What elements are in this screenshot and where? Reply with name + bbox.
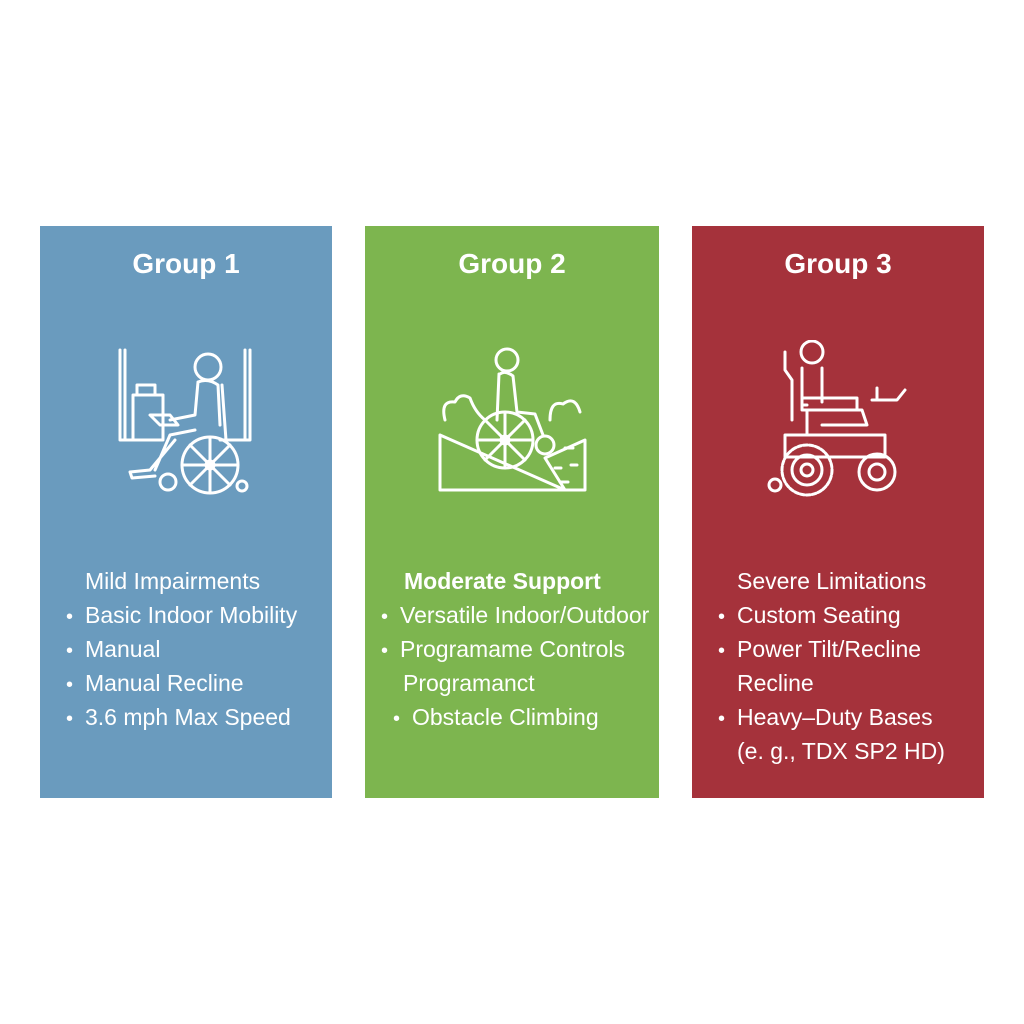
bullets: • xyxy=(393,708,400,730)
text: group 1 features: Manual Recline xyxy=(85,670,244,696)
bullets: • xyxy=(66,708,73,730)
text: group 1 features: Manual xyxy=(85,636,160,662)
text: group 2 features xyxy=(400,568,649,730)
text: group 1 features xyxy=(85,568,298,730)
bullets xyxy=(718,606,725,730)
text: group 1 features: Mild Impairments xyxy=(85,568,260,594)
text: group 3 features: Heavy–Duty Bases xyxy=(737,704,933,730)
panel: group 3 xyxy=(692,226,984,798)
text: group 1 features: 3.6 mph Max Speed xyxy=(85,704,291,730)
icon: wheelchair on slope xyxy=(438,348,586,492)
panel: group 1 xyxy=(40,226,332,798)
bullets: • xyxy=(381,606,388,628)
text: group 2 features: Obstacle Climbing xyxy=(412,704,599,730)
bullets: • xyxy=(718,640,725,662)
bullets: • xyxy=(66,640,73,662)
bullets: • xyxy=(66,674,73,696)
text: group 3 features xyxy=(737,568,945,764)
text: group 3 features: Severe Limitations xyxy=(737,568,926,594)
heading: group 3: Group 3 xyxy=(784,248,892,279)
text: group 2 features: Programame Controls xyxy=(400,636,625,662)
text: group 3 features: Power Tilt/Recline xyxy=(737,636,921,662)
text: group 3 features: Custom Seating xyxy=(737,602,901,628)
text: group 3 features: Recline xyxy=(737,670,814,696)
panel: group 2 xyxy=(365,226,659,798)
text: group 2 features: Moderate Support xyxy=(404,568,601,594)
heading: group 1: Group 1 xyxy=(132,248,240,279)
text: group 3 features: (e. g., TDX SP2 HD) xyxy=(737,738,945,764)
icon: manual wheelchair indoors xyxy=(118,348,252,494)
bullets: • xyxy=(718,606,725,628)
text: group 1 features: Basic Indoor Mobility xyxy=(85,602,297,628)
bullets: • xyxy=(718,708,725,730)
heading: group 2: Group 2 xyxy=(458,248,566,279)
bullets: • xyxy=(66,606,73,628)
bullets xyxy=(66,606,73,730)
text: group 2 features: Programanct xyxy=(403,670,535,696)
icon: power wheelchair xyxy=(768,340,907,496)
bullets: • xyxy=(381,640,388,662)
bullets xyxy=(381,606,400,730)
text: group 2 features: Versatile Indoor/Outdoor xyxy=(400,602,649,628)
